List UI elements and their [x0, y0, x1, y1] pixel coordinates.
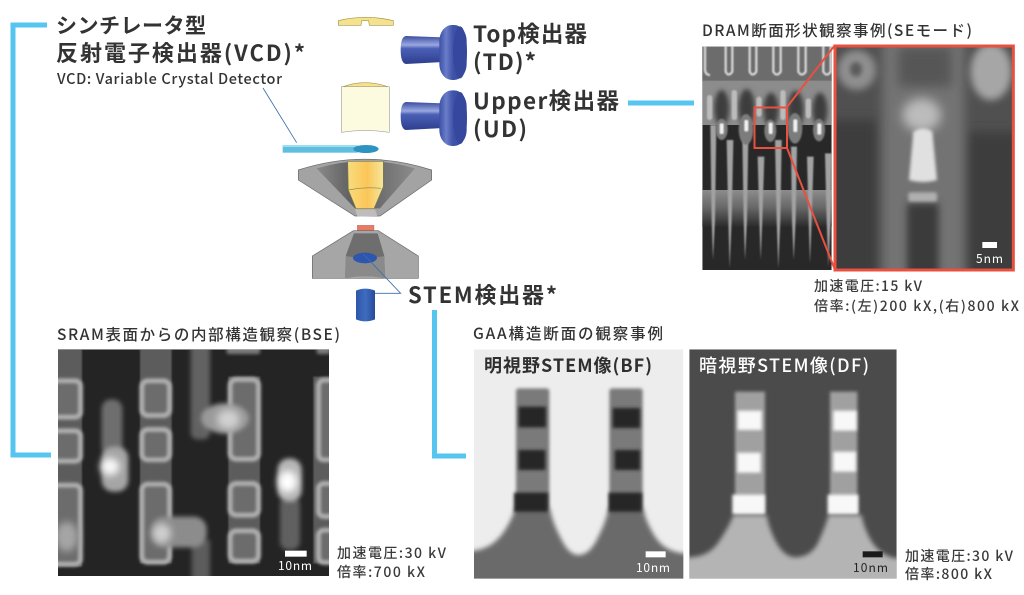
left bracket connector: VCD to BSE image	[13, 25, 51, 455]
scale label: 10nm: 10nm	[278, 557, 312, 574]
light guide with yellow cap	[341, 83, 389, 132]
icon: STEM detector cylinder	[356, 289, 375, 321]
leader line to STEM label	[363, 254, 401, 293]
label: Top detector	[473, 17, 587, 77]
caption: SRAM conditions: 倍率:700 kX	[337, 562, 426, 582]
label: Upper detector: Upper検出器	[473, 84, 619, 116]
caption: DRAM conditions: 倍率:(左)200 kX,(右)800 kX	[814, 296, 1020, 316]
detector diagram	[263, 17, 467, 321]
image label: DF: 暗視野STEM像(DF)	[699, 352, 869, 378]
heading: VCD detector: VCD: Variable Crystal Detector	[56, 68, 282, 89]
scale label: 5nm: 5nm	[976, 250, 1003, 267]
caption: DRAM conditions	[814, 276, 1020, 316]
panel: SRAM surface observation	[50, 323, 447, 587]
heading: DRAM: DRAM断面形状観察事例(SEモード)	[702, 19, 972, 41]
panel: DRAM cross-section	[695, 19, 1024, 316]
top yellow disc	[338, 17, 393, 25]
image: DRAM magnified	[834, 44, 1015, 272]
image: SRAM BSE micrograph	[58, 349, 329, 576]
scale label: 10nm: 10nm	[636, 559, 670, 576]
label: Top detector: (TD)*	[473, 45, 536, 77]
caption: SRAM conditions	[337, 543, 447, 582]
heading: VCD detector: シンチレータ型	[56, 10, 206, 40]
image: dark-field STEM	[689, 349, 897, 579]
heading: VCD detector	[56, 10, 305, 89]
label: Upper detector: (UD)	[473, 112, 527, 144]
caption: GAA conditions: 加速電圧:30 kV	[905, 546, 1014, 566]
blue STEM detector disc	[353, 253, 377, 263]
specimen	[357, 225, 374, 231]
image: bright-field STEM	[474, 350, 684, 579]
label: STEM detector: STEM検出器*	[408, 278, 557, 310]
caption: GAA conditions: 倍率:800 kX	[905, 564, 993, 584]
icon: Top detector	[401, 25, 467, 80]
label: Top detector: Top検出器	[473, 17, 587, 49]
caption: SRAM conditions: 加速電圧:30 kV	[337, 543, 447, 563]
label: Upper detector	[473, 84, 619, 144]
upper objective pole piece	[298, 159, 432, 217]
scale label: 10nm: 10nm	[853, 559, 888, 576]
VCD scintillator plate	[263, 88, 379, 153]
heading: SRAM: SRAM表面からの内部構造観察(BSE)	[57, 323, 340, 345]
heading: GAA: GAA構造断面の観察事例	[473, 322, 663, 344]
panel: GAA cross-section	[474, 326, 1013, 580]
icon: Upper detector	[401, 90, 467, 146]
image: DRAM overview	[702, 46, 832, 270]
caption: DRAM conditions: 加速電圧:15 kV	[814, 276, 923, 296]
connector: STEM detector to GAA images	[434, 310, 466, 456]
lower objective pole piece	[312, 231, 418, 278]
image label: BF: 明視野STEM像(BF)	[484, 352, 652, 378]
connector: Upper detector to DRAM image	[628, 100, 694, 106]
heading: VCD detector: 反射電子検出器(VCD)*	[56, 36, 305, 68]
zoom lines and selection box	[754, 45, 835, 270]
caption: GAA conditions	[905, 546, 1014, 584]
